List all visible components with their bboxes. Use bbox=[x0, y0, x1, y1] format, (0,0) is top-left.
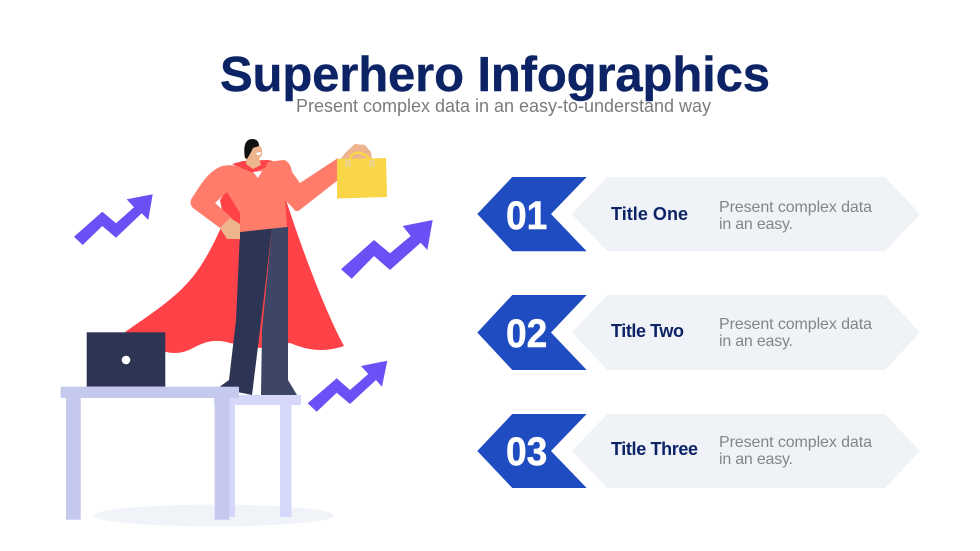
icon: growth arrow lower bbox=[308, 361, 387, 412]
light banner 03 bbox=[572, 414, 920, 488]
number 01: 01 bbox=[506, 194, 547, 238]
raised hand bbox=[338, 144, 372, 162]
panel: item 02 bbox=[477, 295, 920, 370]
head bbox=[244, 139, 262, 159]
hand on hip bbox=[220, 218, 240, 239]
description 03: in an easy. bbox=[719, 451, 793, 468]
front table bbox=[61, 387, 239, 520]
number 03: 03 bbox=[506, 430, 547, 474]
subtitle: Present complex data in an easy-to-understand way bbox=[296, 96, 711, 116]
laptop bbox=[87, 332, 165, 387]
trousers light leg bbox=[261, 227, 297, 395]
panel: item 03 bbox=[477, 414, 920, 488]
number 02: 02 bbox=[506, 312, 547, 356]
illustration: superhero on table bbox=[61, 139, 433, 526]
description 01: in an easy. bbox=[719, 216, 793, 233]
shirt bbox=[191, 158, 338, 232]
blue chevron 02 bbox=[477, 295, 587, 370]
description 02: in an easy. bbox=[719, 333, 793, 350]
cape bbox=[125, 190, 344, 353]
blue chevron 03 bbox=[477, 414, 587, 488]
icon: growth arrow left bbox=[74, 194, 153, 245]
light banner 02 bbox=[572, 295, 920, 370]
panel: item 01 bbox=[477, 177, 920, 251]
heading 01: Title One bbox=[611, 204, 688, 224]
title: Superhero Infographics bbox=[220, 48, 770, 102]
back table bbox=[214, 395, 301, 517]
description 03: Present complex data bbox=[719, 434, 872, 451]
blue chevron 01 bbox=[477, 177, 587, 251]
icon: shopping bag bbox=[337, 153, 387, 198]
floor shadow bbox=[94, 504, 334, 526]
neck bbox=[246, 155, 261, 169]
heading 03: Title Three bbox=[611, 439, 698, 459]
heading 02: Title Two bbox=[611, 321, 684, 341]
description 02: Present complex data bbox=[719, 316, 872, 333]
description 01: Present complex data bbox=[719, 199, 872, 216]
trousers dark leg bbox=[218, 228, 272, 395]
collar bbox=[232, 160, 273, 173]
icon: growth arrow right bbox=[341, 220, 433, 279]
undershirt bbox=[253, 171, 262, 178]
light banner 01 bbox=[572, 177, 920, 251]
